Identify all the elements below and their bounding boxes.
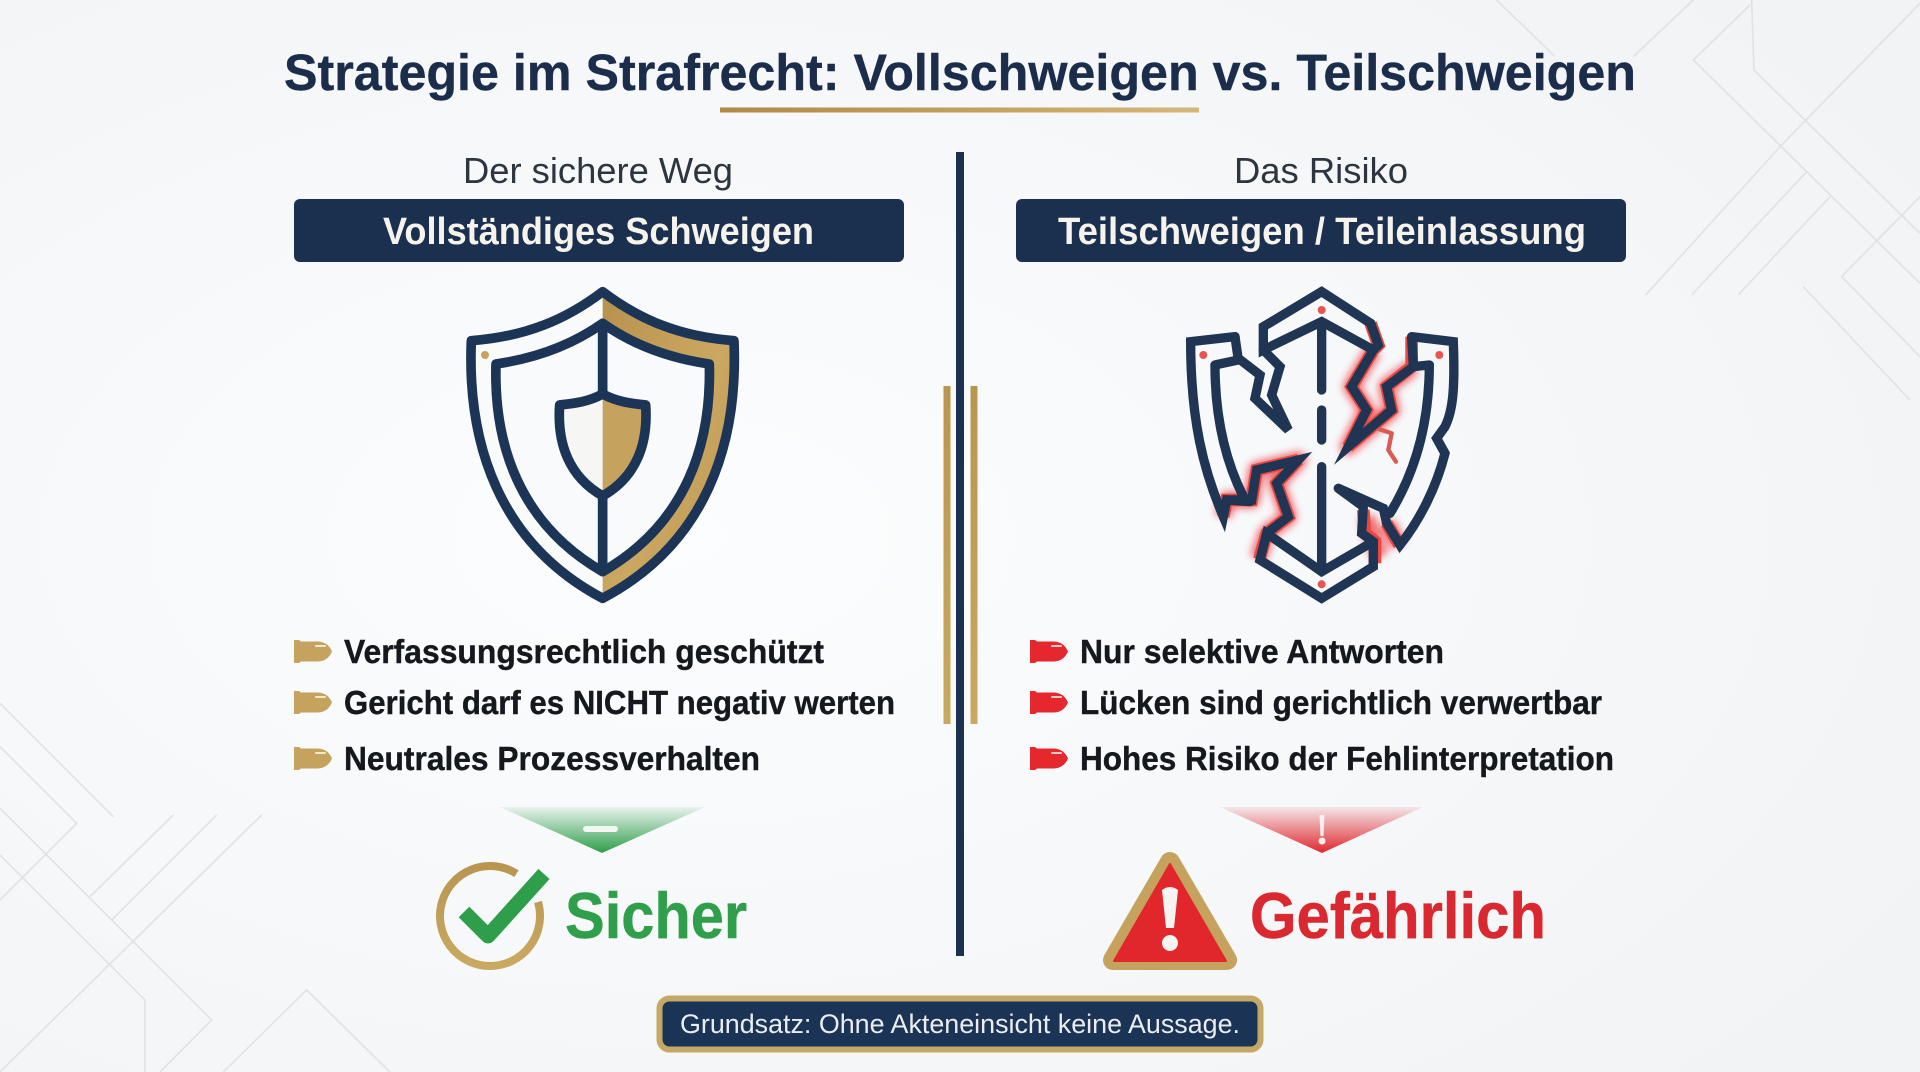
bullet item 1: Verfassungsrechtlich geschützt (344, 633, 824, 670)
heading bar: left (294, 199, 904, 262)
subheading: right: Das Risiko (1234, 150, 1408, 191)
title underline (720, 108, 1199, 112)
red rivets (1199, 306, 1443, 588)
bullet item 1: Nur selektive Antworten (1080, 633, 1444, 670)
icon: warning triangle (1113, 862, 1227, 961)
arrow: green triangle (500, 807, 705, 853)
bullet list: right (1030, 633, 1614, 777)
heading bar: left: Vollständiges Schweigen (383, 211, 814, 253)
small red crack (1377, 428, 1396, 462)
callout: principle: Grundsatz: Ohne Akteneinsicht keine Aussage. (680, 1009, 1240, 1039)
icon: intact shield (471, 292, 734, 598)
bullet item 2: Gericht darf es NICHT negativ werten (344, 684, 895, 721)
panel: left, vollständiges Schweigen (294, 150, 904, 966)
bullet item 3: Hohes Risiko der Fehlinterpretation (1080, 740, 1614, 777)
center divider (944, 152, 978, 956)
verdict: Sicher: Sicher (565, 879, 747, 952)
arrow: red triangle (1220, 807, 1423, 853)
bullet item 3: Neutrales Prozessverhalten (344, 740, 760, 777)
heading bar: right: Teilschweigen / Teileinlassung (1058, 211, 1586, 253)
subheading: left: Der sichere Weg (463, 150, 733, 191)
background line pattern: bottom left (0, 703, 390, 1072)
bullet item 2: Lücken sind gerichtlich verwertbar (1080, 684, 1602, 721)
navy fragments (1191, 292, 1454, 598)
red glow behind cracks (1223, 350, 1413, 558)
icon: gold ring with green check (440, 866, 544, 966)
icon: broken shield (1191, 292, 1454, 598)
verdict: Gefährlich: Gefährlich (1250, 879, 1546, 952)
title: Strategie im Strafrecht: Vollschweigen vs. Teilschweigen (284, 44, 1636, 101)
panel: right, Teilschweigen (1016, 150, 1626, 961)
callout: principle (660, 998, 1260, 1050)
heading bar: right (1016, 199, 1626, 262)
bullet list: left (294, 633, 895, 777)
red crack outlines (1223, 323, 1412, 563)
background line pattern: top right (1497, 0, 1920, 400)
